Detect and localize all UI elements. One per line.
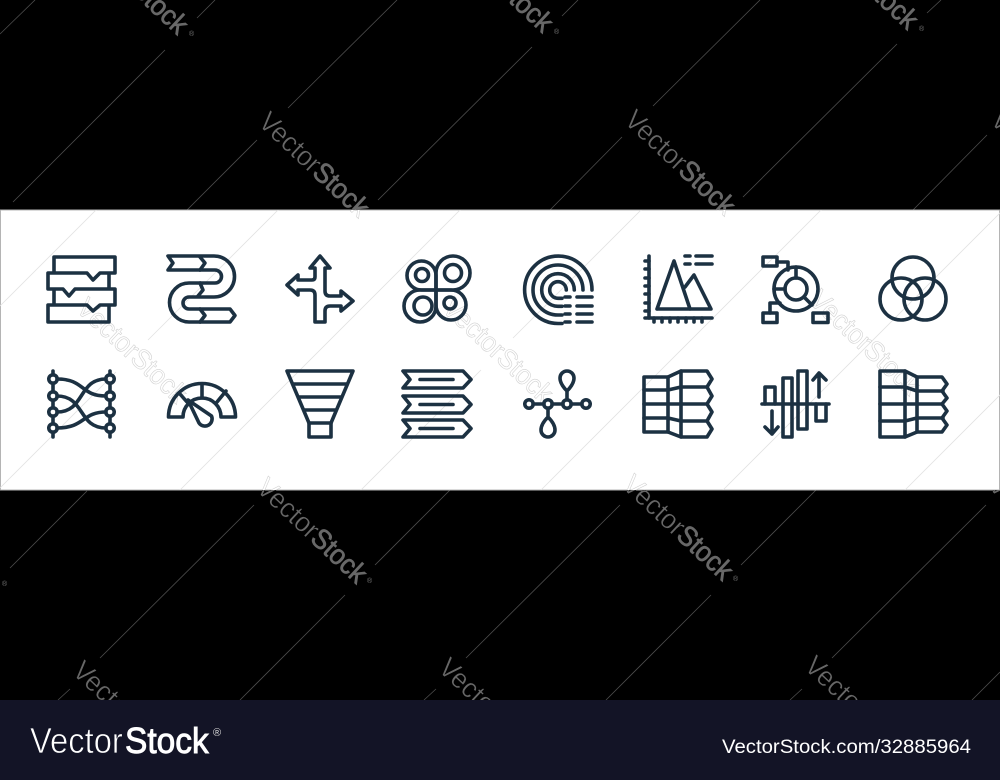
icon: ring flow diagram [763,257,828,322]
registered marks: ® [367,577,373,585]
icon: sales funnel [287,371,353,437]
icon: broken layered stack [48,257,115,322]
watermark bottom 2: VectorStock [433,652,556,770]
band watermark 2: VectorStock [437,292,560,410]
icon: stacked ribbon list [403,371,471,437]
icon: concentric radial chart [525,256,592,324]
icon: three way direction arrows [287,256,353,322]
icon: speedometer gauge [168,383,236,426]
registered marks: ® [733,575,739,583]
registered marks: ® [919,25,925,33]
icon: node tree with drops [525,371,590,437]
band watermark head 1: VectorStock [251,472,374,590]
footer logo: Vector [30,722,123,761]
registered marks: ® [2,580,8,588]
band watermark tail 1: VectorStock [253,106,376,224]
watermark lower 2: VectorStock [617,469,740,587]
band watermark head 2: VectorStock [617,469,740,587]
icon: folded table right [880,371,947,437]
icon: four ring matrix [404,256,470,322]
icon: mountain area chart [645,256,712,322]
footer logo: Stock [125,722,209,761]
white band [0,210,1000,490]
registered marks: ® [189,30,195,38]
watermarks on white band [80,210,920,490]
watermark lower 1: VectorStock [251,472,374,590]
footer bar [0,700,1000,780]
footer logo [30,722,221,761]
icon: folded table left [644,371,712,437]
watermark bottom 1: VectorStock [67,655,190,773]
band watermark 3: VectorStock [804,284,927,402]
footer logo: ® [213,727,221,739]
icon: venn diagram [880,257,946,320]
watermark upper 1: VectorStock [253,106,376,224]
footer image id: VectorStock.com/32885964 [722,736,971,758]
watermark upper 2: VectorStock [619,104,742,222]
band watermark 1: VectorStock [71,292,194,410]
band watermark tail 2: VectorStock [619,104,742,222]
icon: up and down bar chart [762,371,829,437]
icon: winding road arrow [168,256,235,322]
registered marks [2,25,925,588]
watermark bottom 3: VectorStock [799,650,922,768]
icon: connected network mesh [49,371,114,437]
registered marks: ® [554,28,560,36]
